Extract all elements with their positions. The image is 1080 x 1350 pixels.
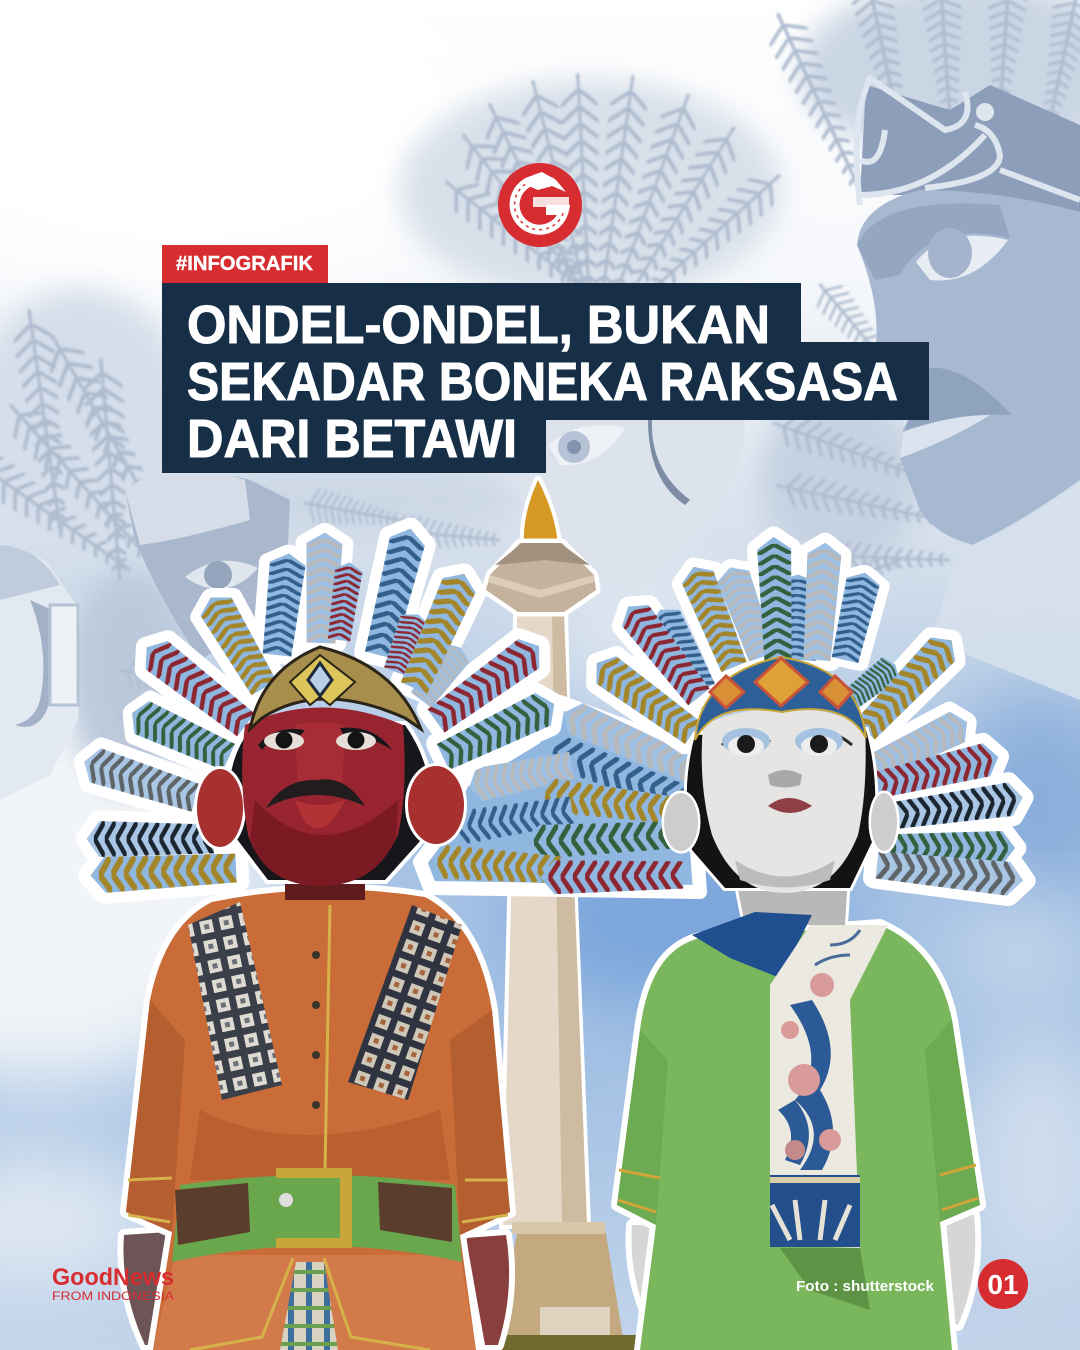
tag: #INFOGRAFIK: [162, 245, 328, 283]
female headdress: [695, 657, 866, 740]
trouser gap with plaid cloth: [280, 1262, 338, 1350]
title block: ONDEL-ONDEL, BUKAN: [187, 295, 770, 355]
page number badge: 01: [987, 1269, 1019, 1300]
female side-spreading feathers with halo: [420, 698, 700, 894]
hair band: [860, 85, 1080, 215]
brand wordmark: GoodNews from Indonesia: [52, 1264, 174, 1303]
male hair: [228, 725, 431, 880]
male neck: [285, 860, 365, 900]
brand wordmark: GoodNews from Indonesia: FROM INDONESIA: [52, 1289, 174, 1303]
logo: GoodNews red circle emblem: [498, 163, 582, 247]
lips: [905, 368, 1012, 430]
green belt with pouches and buckle: [172, 1168, 462, 1262]
eye: [916, 236, 1008, 280]
title block: SEKADAR BONEKA RAKSASA: [187, 352, 898, 412]
background face: large ondel-ondel on the right: [857, 78, 1080, 700]
male feathers: [79, 524, 562, 894]
male crown: [250, 647, 421, 729]
face mass: [857, 190, 1080, 545]
female neck: [732, 860, 849, 925]
monument shaft: [503, 610, 587, 1225]
batik scarf: [770, 925, 888, 1248]
shirt buttons: [312, 951, 320, 1109]
female feathers: [587, 536, 1025, 897]
female head: [664, 657, 897, 893]
background feather crowns: [0, 0, 1080, 737]
male shirt and trousers: [126, 890, 510, 1350]
female green dress: [617, 925, 980, 1350]
female hands: [631, 1215, 975, 1330]
male face: [242, 708, 405, 886]
female feather halo: [587, 536, 1025, 897]
background face: center woman: [520, 420, 745, 590]
Monas monument: [486, 480, 650, 1350]
photo credit: Foto : shutterstock: [796, 1278, 935, 1295]
female ears: [664, 793, 698, 851]
monument capital: [486, 543, 596, 612]
monument base: [495, 1228, 625, 1350]
brand wordmark: GoodNews from Indonesia: GoodNews: [52, 1264, 174, 1291]
blue collar: [692, 912, 812, 978]
page number badge: [978, 1259, 1028, 1309]
title block: DARI BETAWI: [187, 409, 517, 469]
title block: [162, 283, 929, 473]
male ears: [197, 769, 243, 847]
shirt collar: [930, 480, 1080, 700]
female hair: [687, 730, 875, 888]
male feather halo: [79, 524, 562, 894]
male checked straps: [188, 902, 282, 1100]
male ondel-ondel figure: [79, 524, 562, 1350]
monument flame: [524, 480, 558, 546]
male hands: [123, 1232, 509, 1345]
crown ornament: [857, 78, 1080, 205]
background face: left figure with crown: [0, 470, 290, 800]
tag: #INFOGRAFIK: #INFOGRAFIK: [176, 253, 314, 275]
male head: [197, 647, 464, 900]
female face: [702, 708, 866, 893]
female ondel-ondel figure: [587, 536, 1025, 1350]
soft tone under background crowns: [400, 80, 780, 300]
